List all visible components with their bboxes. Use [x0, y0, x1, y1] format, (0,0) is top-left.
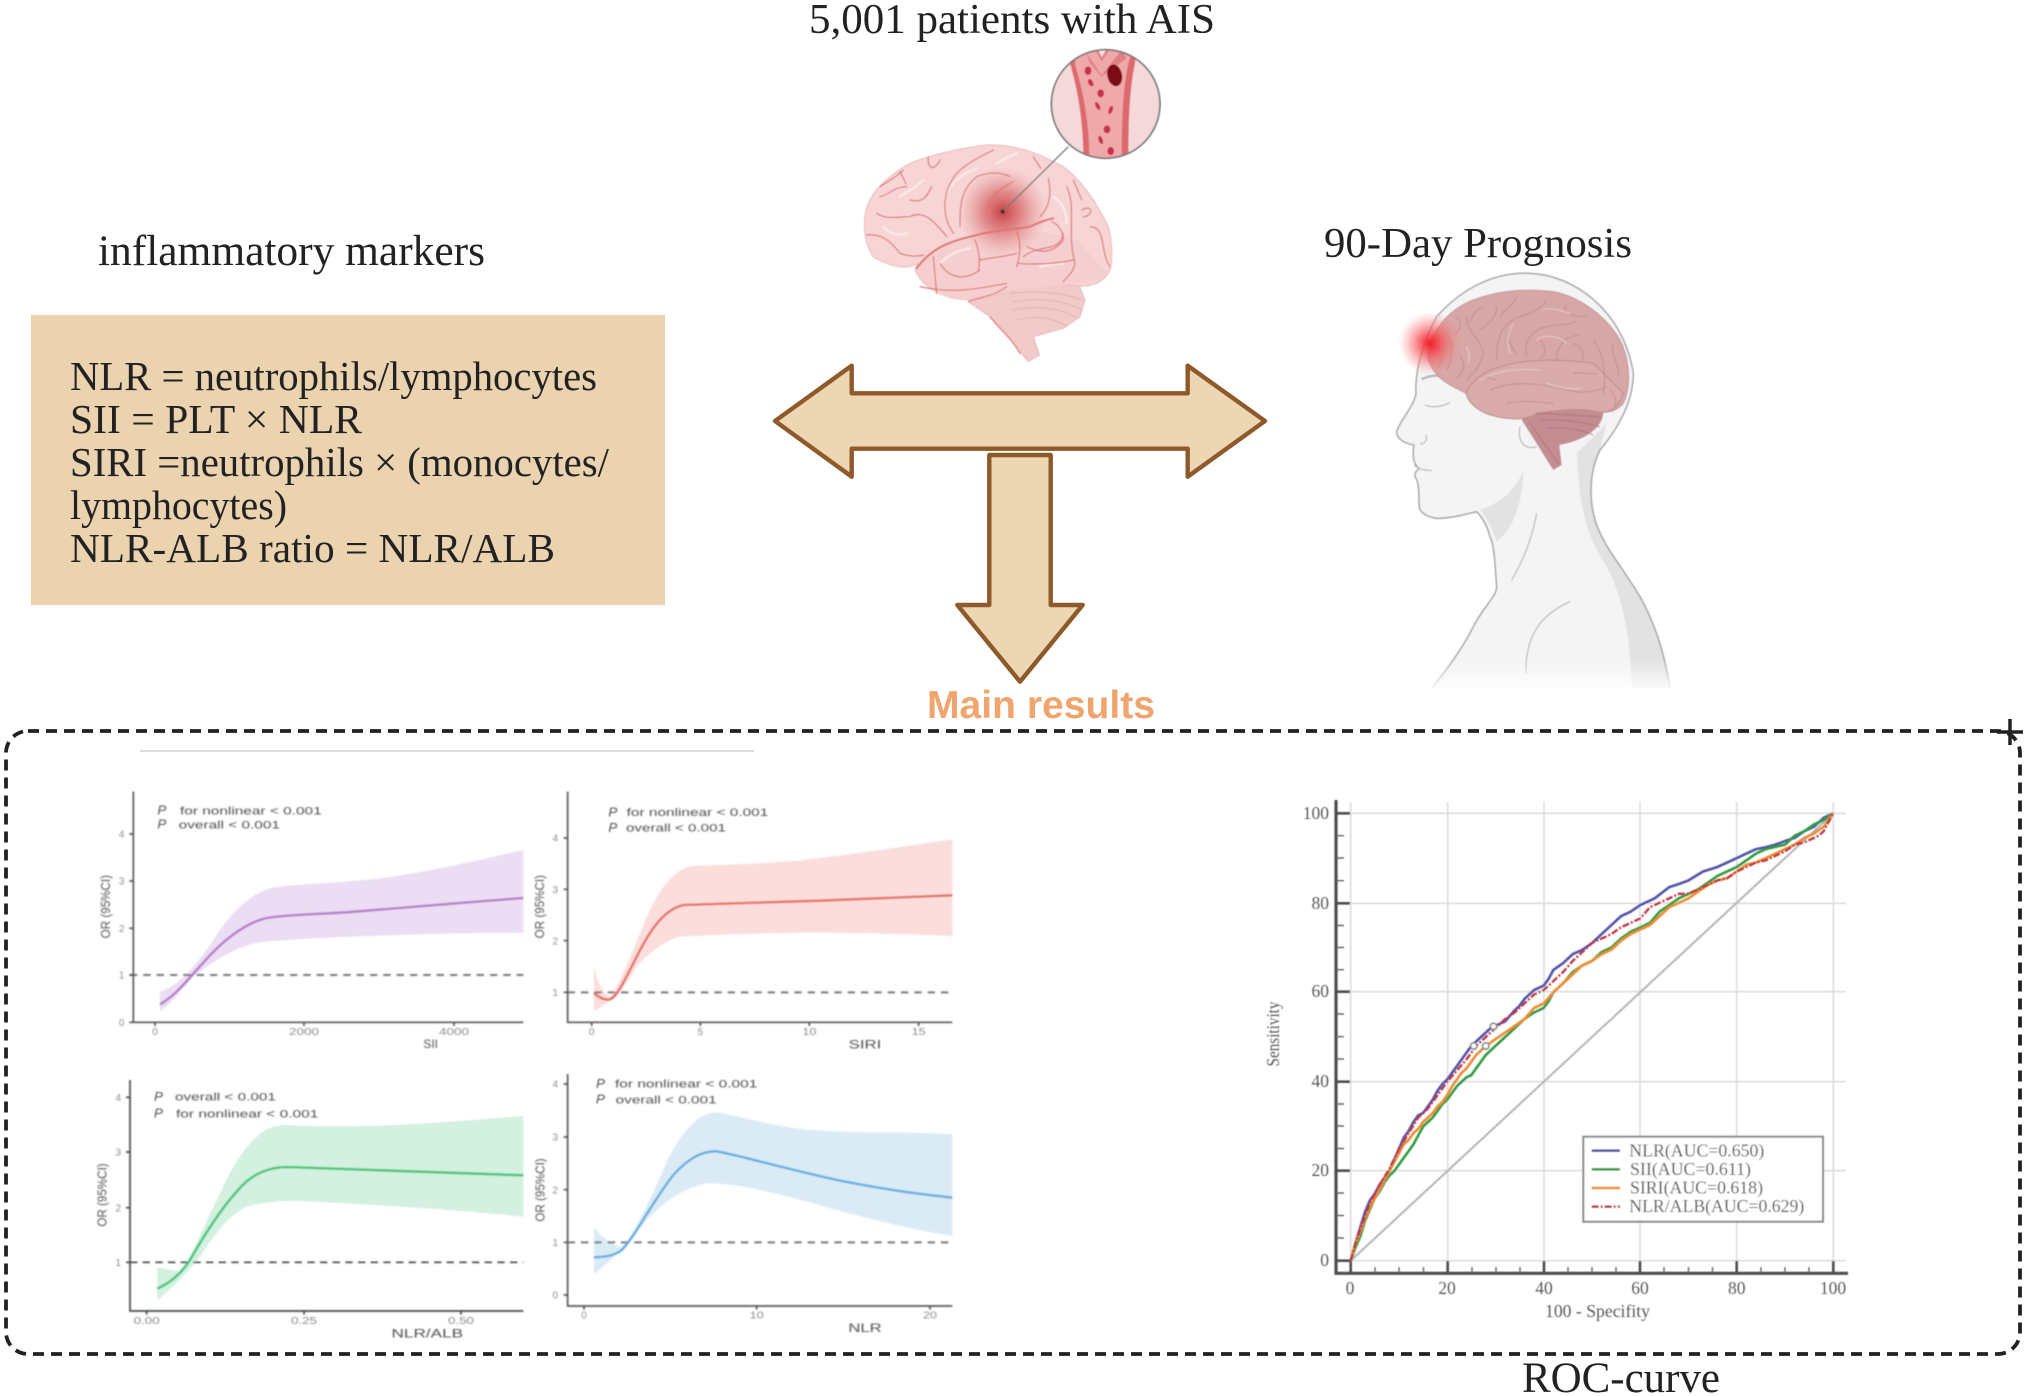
x tick labels: 60	[1631, 1278, 1649, 1298]
brain	[1427, 290, 1629, 419]
y axis title: Sensitivity	[1263, 1001, 1283, 1066]
axis labels: NLR	[848, 1321, 882, 1335]
axis labels: 3	[116, 1148, 122, 1159]
p values: P	[608, 804, 617, 819]
spline curve	[157, 1167, 523, 1289]
axis labels	[99, 830, 470, 1051]
heading: 90-Day Prognosis: 90-Day Prognosis	[1324, 220, 1632, 267]
p values: overall < 0.001	[175, 1092, 276, 1104]
cerebellum and brain stem	[1522, 403, 1603, 470]
p values: overall < 0.001	[616, 1094, 717, 1106]
definition text block: lymphocytes)	[70, 482, 287, 528]
axes	[126, 1080, 523, 1315]
confidence band	[157, 1116, 523, 1301]
cortical highlights	[883, 153, 1067, 267]
definition text block: SII = PLT × NLR	[70, 396, 363, 442]
p values	[608, 804, 768, 835]
axis labels: 0	[152, 1027, 158, 1038]
definition text block: NLR-ALB ratio = NLR/ALB	[70, 525, 555, 571]
pain glow	[1398, 312, 1462, 375]
spline curve	[160, 898, 523, 1004]
p values: P	[154, 1106, 163, 1121]
panel: inflammatory marker definitions	[31, 315, 665, 605]
p values: overall < 0.001	[626, 823, 726, 835]
axis labels: 2	[553, 1185, 559, 1196]
panel: dashed results frame	[6, 719, 2023, 1354]
axis labels: SII	[423, 1037, 438, 1051]
p values: for nonlinear < 0.001	[176, 1108, 318, 1120]
back of neck shadow	[1577, 423, 1669, 688]
brain cerebrum	[864, 145, 1112, 300]
axis labels: 4	[553, 1080, 559, 1091]
p values: overall < 0.001	[179, 819, 280, 831]
ROC curve lines	[1351, 813, 1833, 1261]
heading: inflammatory markers: inflammatory markers	[98, 228, 485, 275]
curve: SII	[1351, 813, 1833, 1261]
axis labels: 10	[802, 1027, 817, 1038]
axis labels: SIRI	[849, 1037, 881, 1051]
ischemic glow	[958, 167, 1048, 257]
silhouette outline	[1397, 273, 1670, 688]
axis labels: 0	[589, 1027, 595, 1038]
p values: P	[596, 1092, 605, 1107]
axis labels: 5	[698, 1027, 704, 1038]
reference line	[130, 1260, 523, 1265]
axis labels: 4	[553, 834, 559, 845]
axis labels: NLR/ALB	[391, 1326, 463, 1340]
x tick labels: 100	[1820, 1278, 1846, 1298]
ROC legend	[1583, 1137, 1823, 1222]
axis labels: OR (95%CI)	[96, 1163, 110, 1227]
axis labels: 3	[553, 885, 559, 896]
definition text block	[70, 353, 610, 571]
axis labels: OR (95%CI)	[534, 1158, 548, 1222]
axis labels: 0.50	[448, 1316, 475, 1327]
jaw shadow	[1480, 470, 1523, 542]
p values: P	[157, 803, 166, 818]
ROC legend: SIRI(AUC=0.618)	[1630, 1178, 1763, 1198]
axis labels: 3	[119, 877, 125, 888]
x tick labels: 80	[1728, 1278, 1746, 1298]
x tick labels	[1346, 1278, 1846, 1298]
axes	[129, 792, 523, 1026]
axis labels: 1	[553, 1238, 559, 1249]
axes and ticks	[1336, 800, 1848, 1273]
heading: Main results: Main results	[927, 684, 1155, 727]
x axis title: 100 - Specifity	[1545, 1301, 1650, 1321]
axis labels: 20	[923, 1310, 938, 1321]
spline curve	[594, 895, 952, 1000]
axis labels	[534, 1080, 938, 1335]
axis labels: 2	[553, 936, 559, 947]
reference line	[568, 1239, 952, 1245]
p values: for nonlinear < 0.001	[615, 1079, 757, 1091]
axis labels: OR (95%CI)	[99, 875, 113, 938]
confidence band	[160, 850, 523, 1012]
axis labels: 4000	[439, 1027, 470, 1038]
p values: P	[608, 820, 617, 835]
temporal lobe shading	[917, 232, 1108, 300]
y tick labels	[1303, 803, 1329, 1270]
axis labels: 2	[119, 924, 125, 935]
axis labels: 4	[116, 1093, 122, 1104]
arrow: downward arrow to main results	[957, 455, 1083, 682]
callout line	[1003, 147, 1068, 212]
axis labels: 1	[553, 988, 559, 999]
ROC legend: NLR/ALB(AUC=0.629)	[1629, 1196, 1804, 1216]
axis labels: 2	[116, 1203, 122, 1214]
reference line	[130, 972, 523, 978]
axis labels: 0	[581, 1310, 587, 1321]
definition text block: NLR = neutrophils/lymphocytes	[70, 353, 597, 399]
axis labels: 0.25	[291, 1316, 318, 1327]
x tick labels: 0	[1346, 1278, 1355, 1298]
x tick labels: 20	[1438, 1278, 1456, 1298]
axis labels	[96, 1093, 475, 1340]
head and shoulders silhouette	[1397, 273, 1670, 688]
cut-off markers	[1471, 1023, 1497, 1049]
cerebellum folds	[1530, 413, 1602, 463]
axis labels: OR (95%CI)	[533, 875, 547, 938]
p values: for nonlinear < 0.001	[180, 805, 322, 817]
chart: NLR restricted cubic spline	[534, 1074, 952, 1335]
axes	[564, 1074, 952, 1310]
confidence band	[594, 1112, 952, 1274]
reference line	[568, 989, 952, 995]
spline curve	[594, 1151, 952, 1257]
y tick labels: 40	[1312, 1071, 1329, 1091]
curve: NLR/ALB	[1351, 813, 1833, 1261]
brain gyri	[1437, 297, 1619, 407]
axis labels: 0	[553, 1291, 559, 1302]
icon: human head profile with brain	[1397, 273, 1680, 693]
p values	[154, 1089, 318, 1121]
p values: P	[157, 817, 166, 832]
p values	[157, 803, 322, 832]
brain cerebellum and stem	[968, 283, 1085, 362]
bottom fade	[1420, 660, 1680, 693]
axis labels: 3	[553, 1133, 559, 1144]
y tick labels: 80	[1312, 893, 1329, 913]
axis labels: 1	[116, 1258, 122, 1269]
confidence band	[594, 839, 952, 1011]
arrow: double-headed horizontal arrow	[775, 366, 1265, 477]
axis labels: 15	[912, 1027, 926, 1038]
p values	[596, 1076, 757, 1107]
axis labels	[533, 834, 926, 1051]
chart: SIRI restricted cubic spline	[533, 792, 952, 1051]
temporal lobe fold	[1466, 360, 1623, 419]
vessel inset	[1051, 47, 1160, 160]
ROC legend: NLR(AUC=0.650)	[1629, 1140, 1764, 1160]
p values: P	[154, 1089, 163, 1104]
axis labels: 1	[119, 971, 125, 982]
p values: for nonlinear < 0.001	[627, 807, 768, 819]
cerebellum folds	[1010, 292, 1082, 327]
ROC legend: SII(AUC=0.611)	[1630, 1159, 1751, 1179]
axis labels: 4	[119, 830, 125, 841]
neck and shoulder creases	[1414, 376, 1570, 673]
axes	[564, 792, 952, 1026]
p values: P	[596, 1076, 605, 1091]
axis labels: 0	[119, 1018, 125, 1029]
icon: brain with ischemic lesion and vessel inset	[864, 47, 1160, 362]
curve: SIRI	[1351, 813, 1833, 1261]
definition text block: SIRI =neutrophils × (monocytes/	[70, 439, 610, 485]
axis labels: 2000	[289, 1027, 320, 1038]
axis labels: 10	[750, 1310, 764, 1321]
y tick labels: 100	[1303, 803, 1329, 823]
axis labels: 0.00	[134, 1316, 160, 1327]
x tick labels: 40	[1535, 1278, 1553, 1298]
grid lines	[1336, 802, 1846, 1273]
chart: NLR/ALB restricted cubic spline	[96, 1080, 523, 1340]
y tick labels: 60	[1312, 981, 1329, 1001]
diagonal reference	[1351, 813, 1833, 1261]
y tick labels: 0	[1320, 1250, 1329, 1270]
chart: SII restricted cubic spline	[99, 792, 523, 1051]
curve: NLR	[1351, 813, 1833, 1261]
chart: ROC curves	[1263, 800, 1848, 1321]
y tick labels: 20	[1312, 1160, 1329, 1180]
cortical vessels	[867, 150, 1110, 353]
